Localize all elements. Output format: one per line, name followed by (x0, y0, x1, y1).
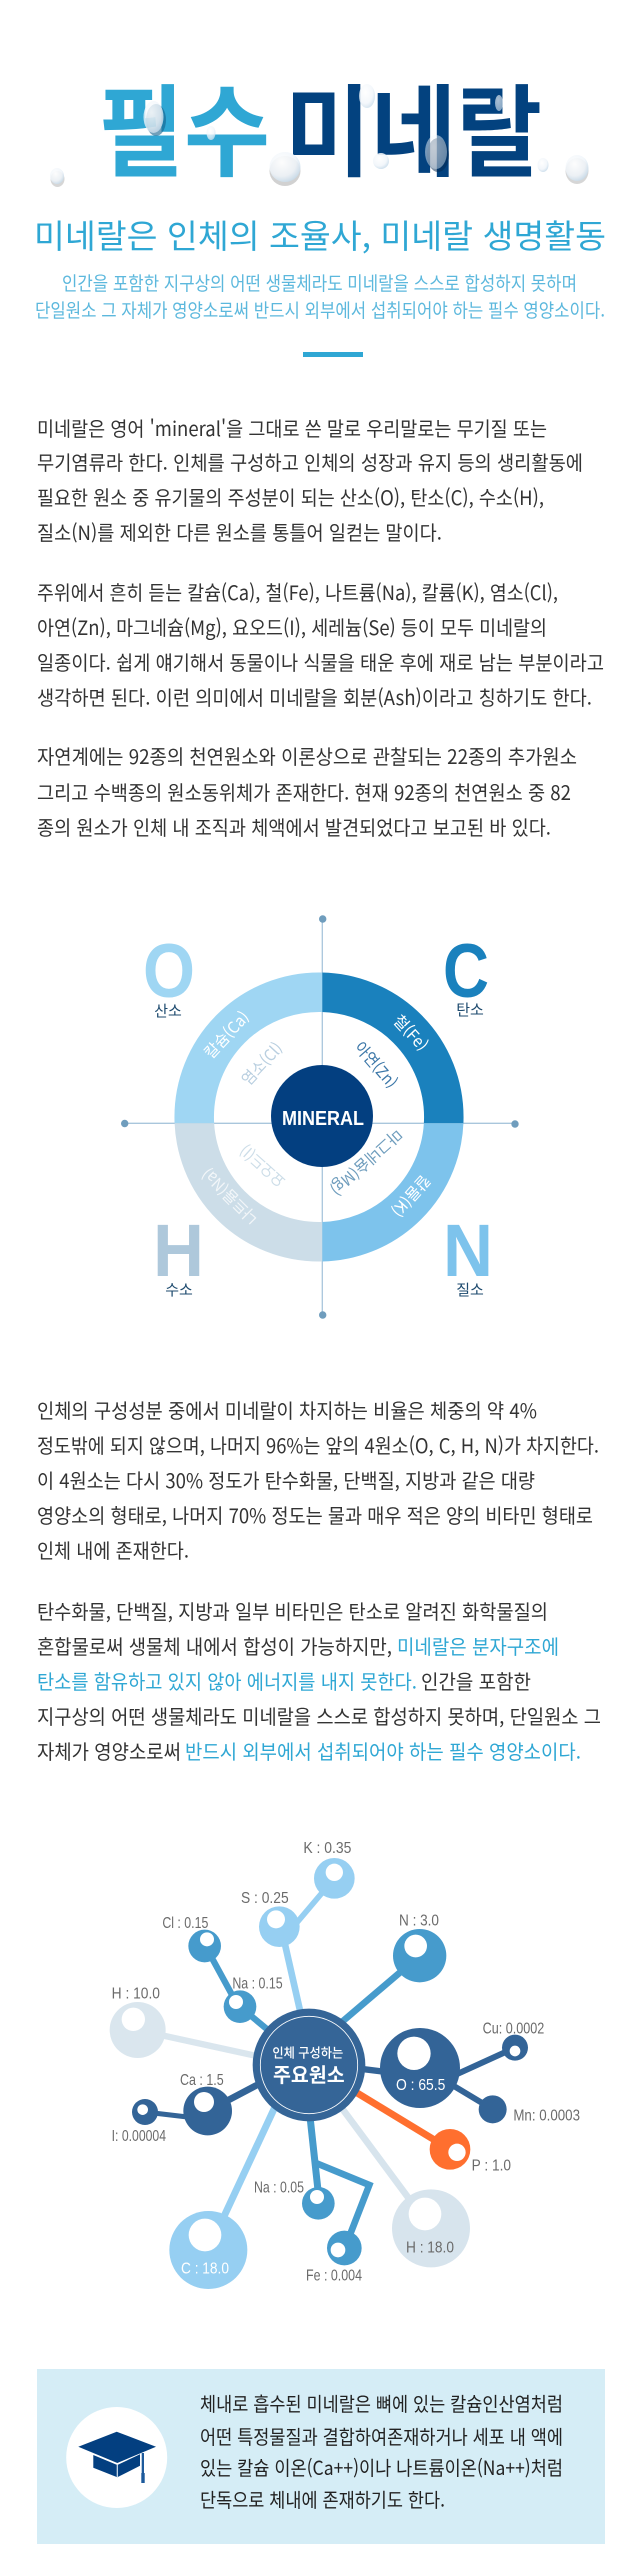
node: O with Cu and Mn (357, 2020, 580, 2125)
body text: paragraph 2: 아연(Zn), 마그네슘(Mg), 요오드(I), 세레늄(Se) 등이 모두 미네랄의 (37, 612, 547, 641)
body text: paragraph 5 with highlights: 탄소를 함유하고 있지 않아 에너지를 내지 못한다. (37, 1666, 417, 1695)
node: K and S: K : 0.35 (303, 1840, 351, 1857)
callout text: 체내로 흡수된 미네랄은 뼈에 있는 칼슘인산염처럼 (200, 2388, 563, 2417)
ring labels: 요오드(I) (234, 1140, 290, 1194)
node: Cl and Na (162, 1915, 283, 2032)
body text: paragraph 2: 일종이다. 쉽게 얘기해서 동물이나 식물을 태운 후에 재로 남는 부분이라고 (37, 647, 604, 676)
icon: graduation cap (66, 2407, 167, 2508)
node: P: P : 1.0 (472, 2157, 511, 2174)
title word: 미네랄: 미네랄 (285, 52, 542, 197)
ring quadrant: oxygen (174, 972, 322, 1123)
callout panel (37, 2369, 605, 2544)
body text: paragraph 5 with highlights: 탄수화물, 단백질, 지방과 일부 비타민은 탄소로 알려진 화학물질의 (37, 1596, 548, 1625)
title (50, 52, 588, 197)
node: H 18.0 (338, 2103, 470, 2267)
hub: 주요원소: 주요원소 (273, 2059, 345, 2088)
molecule diagram: major elements of the body (110, 1840, 580, 2289)
ring labels: 아연(Zn) (350, 1035, 404, 1093)
body text: paragraph 5 with highlights: 반드시 외부에서 섭취되어야 하는 필수 영양소이다. (185, 1736, 581, 1765)
callout text: 있는 칼슘 이온(Ca++)이나 나트륨이온(Na++)처럼 (200, 2452, 563, 2481)
subtitle: 미네랄은 인체의 조율사, 미네랄 생명활동 (34, 210, 606, 258)
node: Ca and I: Ca : 1.5 (180, 2072, 224, 2089)
node: Ca and I: I: 0.00004 (112, 2128, 166, 2145)
body text: paragraph 4: 인체의 구성성분 중에서 미네랄이 차지하는 비율은 체중의 약 4% (37, 1395, 537, 1424)
body text: paragraph 1 (37, 413, 583, 546)
node: Na 0.05 and Fe (254, 2117, 369, 2285)
ring labels: 칼륨(K) (386, 1170, 437, 1223)
node: N: N : 3.0 (399, 1913, 439, 1930)
centre label: MINERAL (282, 1108, 364, 1130)
node: Cl and Na: Cl : 0.15 (162, 1915, 208, 1932)
node: Na 0.05 and Fe: Na : 0.05 (254, 2179, 304, 2196)
body text: paragraph 4: 영양소의 형태로, 나머지 70% 정도는 물과 매우 적은 양의 비타민 형태로 (37, 1500, 593, 1529)
label 산소: 산소 (154, 1000, 182, 1021)
letter H: H (153, 1209, 204, 1292)
hub: 주요원소 (253, 2009, 365, 2121)
callout text: 어떤 특정물질과 결합하여존재하거나 세포 내 액에 (200, 2421, 563, 2450)
title word: 필수: 필수 (98, 52, 270, 197)
body text: paragraph 3: 종의 원소가 인체 내 조직과 체액에서 발견되었다고 보고된 바 있다. (37, 812, 551, 841)
body text: paragraph 3: 그리고 수백종의 원소동위체가 존재한다. 현재 92종의 천연원소 중 82 (37, 777, 571, 806)
ring labels: 철(Fe) (389, 1008, 435, 1056)
node: H 10.0 (110, 1986, 260, 2058)
ring labels: 염소(Cl) (235, 1036, 287, 1090)
body text: paragraph 1: 무기염류라 한다. 인체를 구성하고 인체의 성장과 유지 등의 생리활동에 (37, 447, 583, 476)
body text: paragraph 4: 인체 내에 존재한다. (37, 1535, 189, 1564)
node: O with Cu and Mn: O : 65.5 (396, 2077, 445, 2094)
body text: paragraph 4 (37, 1395, 599, 1564)
node: N (338, 1913, 446, 2025)
node: Cl and Na: Na : 0.15 (232, 1975, 283, 1992)
node: Ca and I (112, 2072, 263, 2145)
node: C 18.0 (169, 2103, 277, 2289)
body text: paragraph 2: 주위에서 흔히 듣는 칼슘(Ca), 철(Fe), 나트륨(Na), 칼륨(K), 염소(Cl), (37, 577, 558, 606)
intro text: 인간을 포함한 지구상의 어떤 생물체라도 미네랄을 스스로 합성하지 못하며 (62, 269, 577, 296)
body text: paragraph 5 with highlights: 지구상의 어떤 생물체라도 미네랄을 스스로 합성하지 못하며, 단일원소 그 (37, 1701, 601, 1730)
node: C 18.0: C : 18.0 (181, 2260, 229, 2277)
node: K and S (241, 1840, 355, 2013)
label 탄소: 탄소 (456, 999, 484, 1020)
letter C: C (443, 929, 489, 1014)
callout text (200, 2388, 563, 2513)
body text: paragraph 1: 필요한 원소 중 유기물의 주성분이 되는 산소(O), 탄소(C), 수소(H), (37, 482, 544, 511)
body text: paragraph 5 with highlights (37, 1596, 601, 1765)
ring labels (195, 1005, 437, 1231)
node: K and S: S : 0.25 (241, 1890, 289, 1907)
ring quadrant: hydrogen (174, 1123, 322, 1262)
water drops (50, 84, 588, 187)
ring labels: 마그네슘(Mg) (326, 1124, 408, 1202)
donut diagram: mineral and the four elements (121, 915, 519, 1319)
body text: paragraph 4: 정도밖에 되지 않으며, 나머지 96%는 앞의 4원소(O, C, H, N)가 차지한다. (37, 1430, 599, 1459)
accent bar (303, 352, 363, 357)
label 질소: 질소 (456, 1279, 484, 1300)
intro text (35, 269, 605, 323)
hub: 주요원소: 인체 구성하는 (272, 2043, 343, 2062)
node: H 18.0: H : 18.0 (406, 2239, 454, 2256)
body text: paragraph 5 with highlights: 자체가 영양소로써 (37, 1736, 181, 1765)
callout text: 단독으로 체내에 존재하기도 한다. (200, 2484, 445, 2513)
ring labels: 칼슘(Ca) (197, 1005, 254, 1063)
ring quadrant: carbon (322, 972, 464, 1124)
body text: paragraph 1: 질소(N)를 제외한 다른 원소를 통틀어 일컫는 말이다. (37, 517, 442, 546)
node: O with Cu and Mn: Cu: 0.0002 (483, 2020, 544, 2037)
body text: paragraph 5 with highlights: 혼합물로써 생물체 내에서 합성이 가능하지만, (37, 1631, 392, 1660)
node: Na 0.05 and Fe: Fe : 0.004 (306, 2268, 362, 2285)
node: P (353, 2091, 511, 2174)
body text: paragraph 2 (37, 577, 604, 711)
label 수소: 수소 (165, 1279, 193, 1300)
axis lines with end dots (121, 915, 519, 1319)
body text: paragraph 4: 이 4원소는 다시 30% 정도가 탄수화물, 단백질, 지방과 같은 대량 (37, 1465, 535, 1494)
node: H 10.0: H : 10.0 (112, 1986, 160, 2003)
centre circle (271, 1065, 373, 1167)
ring labels: 나트륨(Na) (195, 1163, 263, 1231)
body text: paragraph 5 with highlights: 미네랄은 분자구조에 (397, 1631, 559, 1660)
body text: paragraph 3 (37, 741, 577, 841)
letter O: O (143, 929, 195, 1014)
node: O with Cu and Mn: Mn: 0.0003 (513, 2108, 580, 2125)
body text: paragraph 1: 미네랄은 영어 'mineral'을 그대로 쓴 말로 우리말로는 무기질 또는 (37, 413, 547, 442)
body text: paragraph 2: 생각하면 된다. 이런 의미에서 미네랄을 회분(Ash)이라고 칭하기도 한다. (37, 682, 592, 711)
ring quadrant: nitrogen (322, 1123, 464, 1262)
body text: paragraph 3: 자연계에는 92종의 천연원소와 이론상으로 관찰되는 22종의 추가원소 (37, 741, 577, 770)
letter N: N (443, 1209, 493, 1292)
body text: paragraph 5 with highlights: 인간을 포함한 (421, 1666, 531, 1695)
